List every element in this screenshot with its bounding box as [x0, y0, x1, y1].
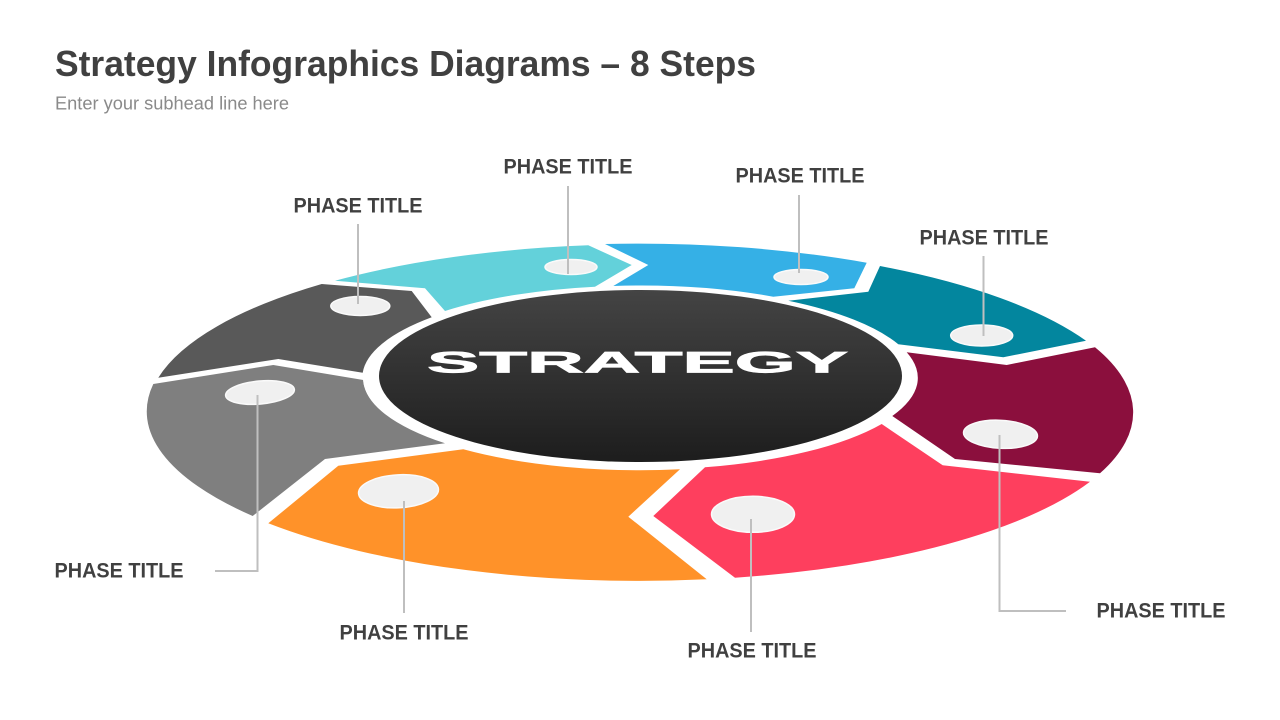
segment: light teal: [335, 245, 632, 311]
marker: blue: [774, 270, 828, 284]
central hub disc: [379, 290, 902, 462]
callout: phase gray: PHASE TITLE: [54, 560, 184, 582]
callout: phase deep teal: [920, 226, 1048, 336]
callout: phase light teal: PHASE TITLE: [504, 156, 632, 178]
marker: maroon: [963, 418, 1038, 450]
segment: gray: [147, 365, 445, 516]
callout: phase gray: [54, 395, 258, 582]
marker: dark gray: [331, 296, 390, 316]
marker: red: [712, 496, 794, 532]
callout: phase blue: [736, 164, 864, 273]
marker: deep teal: [951, 325, 1013, 346]
title: Strategy Infographics Diagrams – 8 Steps: [55, 43, 756, 84]
segment: deep teal: [788, 266, 1086, 357]
central hub ring: [363, 287, 917, 469]
callout: phase maroon: [1000, 435, 1226, 622]
callout: phase dark gray: PHASE TITLE: [294, 194, 422, 218]
marker: orange: [358, 473, 439, 510]
marker: gray: [225, 378, 295, 407]
subhead: Enter your subhead line here: [55, 94, 289, 114]
segment: red: [653, 424, 1090, 578]
callout: phase maroon: PHASE TITLE: [1096, 600, 1226, 622]
marker: light teal: [545, 260, 597, 274]
callout: phase blue: PHASE TITLE: [736, 164, 864, 188]
segment: blue: [605, 244, 867, 297]
callout: phase orange: PHASE TITLE: [340, 622, 468, 644]
callout: phase deep teal: PHASE TITLE: [920, 226, 1048, 250]
hub label: STRATEGY: [427, 346, 848, 380]
segment: maroon: [892, 347, 1133, 473]
segment: dark gray: [158, 284, 432, 378]
callout: phase dark gray: [294, 194, 422, 304]
callout: phase red: PHASE TITLE: [688, 640, 816, 662]
callout: phase light teal: [504, 156, 632, 274]
segment: orange: [268, 449, 707, 581]
